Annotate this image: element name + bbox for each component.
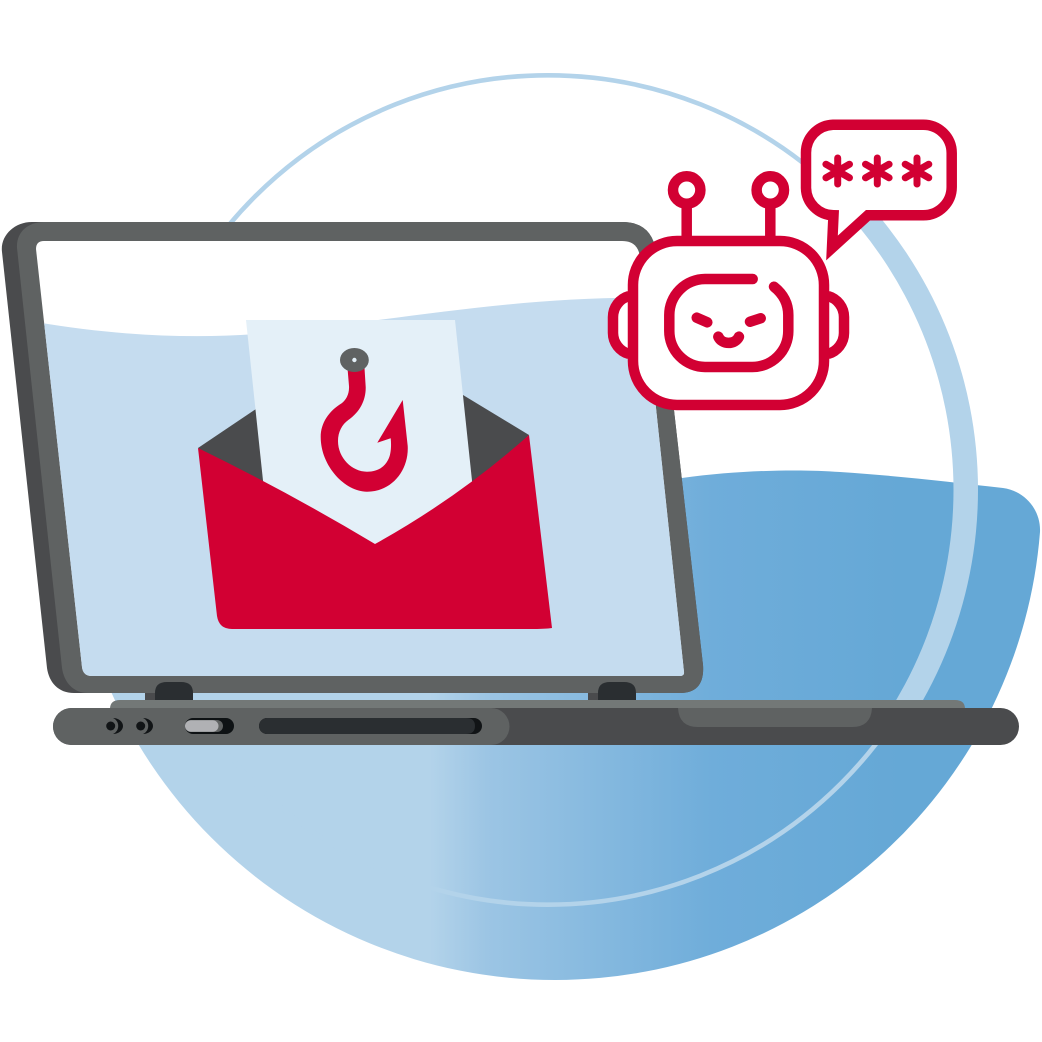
fish hook (321, 348, 408, 492)
background blob (60, 470, 1040, 980)
robot face (669, 279, 788, 367)
envelope back (198, 395, 529, 490)
antennae (673, 176, 784, 238)
robot (613, 176, 844, 405)
hinges (145, 682, 636, 701)
trackpad notch (678, 708, 872, 727)
ears (613, 296, 844, 354)
asterisks (826, 158, 929, 184)
laptop base (53, 700, 1019, 745)
laptop (2, 222, 1019, 745)
switch (185, 718, 234, 734)
envelope with phishing hook (198, 320, 552, 629)
laptop screen frame (2, 222, 703, 693)
laptop screen (30, 236, 700, 690)
robot head (633, 241, 824, 405)
letter (246, 320, 473, 550)
card slot (259, 718, 482, 734)
speech bubble with password asterisks (806, 125, 952, 248)
envelope front (198, 435, 552, 629)
audio ports (106, 718, 153, 734)
background ring (228, 73, 978, 907)
